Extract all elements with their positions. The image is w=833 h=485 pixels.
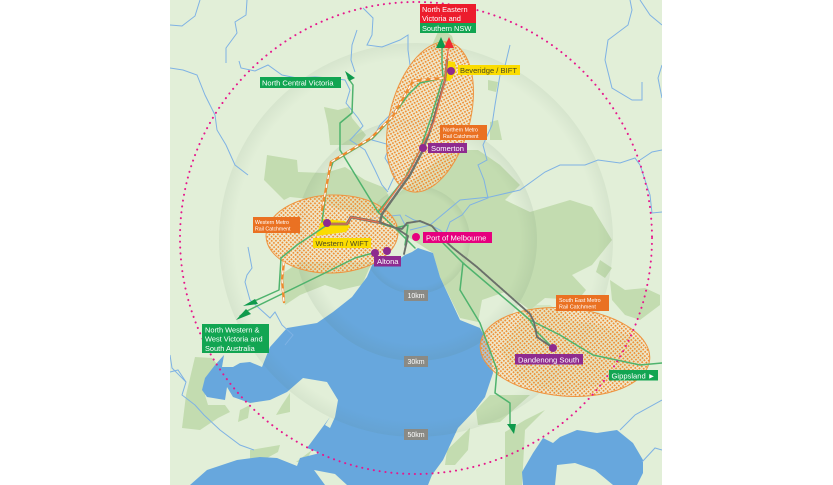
terminal: Altona east <box>383 247 391 255</box>
arrow: north eastern green <box>436 37 446 48</box>
label: Northern Metro Rail Catchment: Rail Catchment <box>443 134 479 140</box>
label: North Western and West Victoria and South Australia <box>202 324 269 353</box>
rivers <box>170 0 662 462</box>
catchment: northern metro <box>386 41 474 193</box>
label: North Eastern Victoria and Southern NSW: North Eastern <box>422 5 468 14</box>
label: Northern Metro Rail Catchment: Northern Metro <box>443 128 478 134</box>
arrow: north eastern red <box>444 37 454 48</box>
land background <box>170 0 662 485</box>
arrow: North Central Victoria <box>345 71 355 81</box>
terminal: Somerton <box>419 144 427 152</box>
Point Nepean land tip <box>314 470 347 485</box>
label: North Central Victoria: North Central Victoria <box>262 78 334 88</box>
Western Port <box>522 430 643 485</box>
yellow terminal shapes <box>316 61 456 236</box>
label: North Western and West Victoria and South Australia: South Australia <box>205 344 256 353</box>
label: 10km <box>404 290 428 301</box>
catchment: western metro <box>265 193 399 275</box>
label: 50km <box>404 429 428 440</box>
label: South East Metro Rail Catchment: South East Metro <box>559 298 601 304</box>
label: 30km: 30km <box>407 359 425 366</box>
label: Western Metro Rail Catchment <box>253 217 300 233</box>
distance rings <box>219 43 613 437</box>
label: Beveridge / BIFT: Beveridge / BIFT <box>460 66 517 75</box>
label: Dandenong South: Dandenong South <box>518 356 579 364</box>
label: North Eastern Victoria and Southern NSW: Southern NSW <box>422 24 471 33</box>
terminal: Western <box>323 219 331 227</box>
label: 10km: 10km <box>407 293 425 300</box>
map of Melbourne rail catchments <box>170 0 662 485</box>
label: North Eastern Victoria and Southern NSW: Victoria and <box>422 14 461 23</box>
terminal: Altona west <box>371 249 379 257</box>
dark metro rail to port and Dandenong <box>382 221 553 348</box>
western and northern coloured rail <box>327 217 382 224</box>
arrow: north western upper <box>243 299 258 306</box>
terminal: Dandenong <box>549 344 557 352</box>
arrow: south <box>507 424 516 434</box>
label: Northern Metro Rail Catchment <box>440 125 487 140</box>
Port Phillip Bay and ocean <box>190 248 493 485</box>
parks and green wedges <box>182 27 660 485</box>
label: Altona: Altona <box>377 257 399 266</box>
label: Gippsland: Gippsland ► <box>612 372 655 380</box>
label: North Western and West Victoria and South Australia: North Western & <box>205 326 260 334</box>
label: Western / WIFT: Western / WIFT <box>316 239 369 248</box>
French Island <box>555 463 613 485</box>
label: Western Metro Rail Catchment: Western Metro <box>255 220 289 226</box>
label: North Eastern Victoria and Southern NSW <box>420 4 476 33</box>
arrow: north western lower <box>236 309 251 320</box>
catchment: south east metro <box>480 307 650 397</box>
label: South East Metro Rail Catchment: Rail Catchment <box>559 304 596 310</box>
label: 30km <box>404 356 428 367</box>
port of Melbourne marker <box>412 233 420 241</box>
label: 50km: 50km <box>407 432 425 439</box>
interstate orange-white corridor <box>322 78 443 210</box>
label: North Western and West Victoria and South Australia: West Victoria and <box>205 334 263 344</box>
green freight routes <box>240 42 662 425</box>
label: Port of Melbourne: Port of Melbourne <box>426 234 486 242</box>
50km dotted boundary <box>180 2 652 474</box>
label: Western Metro Rail Catchment: Rail Catchment <box>255 226 291 232</box>
terminal: Beveridge <box>447 67 455 75</box>
rail corridors <box>240 42 662 425</box>
label: Altona <box>374 256 401 266</box>
label: South East Metro Rail Catchment <box>556 295 609 311</box>
label: Somerton: Somerton <box>431 144 464 153</box>
